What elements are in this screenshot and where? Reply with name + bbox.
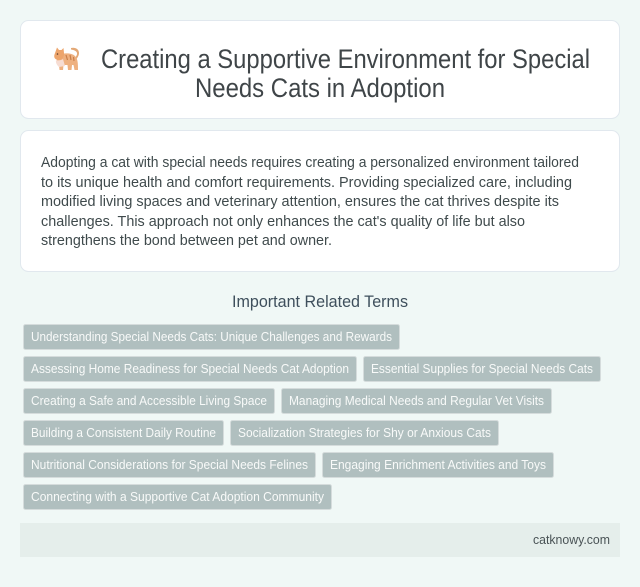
title: Needs Cats in Adoption [195, 73, 445, 103]
tag list: Assessing Home Readiness for Special Needs Cat Adoption [31, 362, 349, 376]
tag list: Engaging Enrichment Activities and Toys [330, 458, 546, 472]
tag list: Building a Consistent Daily Routine [31, 426, 216, 440]
tag list: Essential Supplies for Special Needs Cats [371, 362, 593, 376]
icon: cat [54, 48, 79, 70]
footer: catknowy.com [533, 533, 610, 547]
tag list [24, 324, 600, 510]
tag list: Connecting with a Supportive Cat Adoption Community [31, 490, 325, 504]
panel: description: strengthens the bond between pet and owner. [41, 232, 332, 249]
tag list: Socialization Strategies for Shy or Anxious Cats [238, 426, 491, 440]
tag list: Creating a Safe and Accessible Living Space [31, 394, 267, 408]
panel: description [20, 130, 620, 272]
footer [20, 523, 620, 557]
panel: description: modified living spaces and veterinary attention, ensures the cat thrives despite its [41, 193, 559, 210]
title [101, 44, 590, 103]
tag list: Understanding Special Needs Cats: Unique Challenges and Rewards [31, 330, 392, 344]
panel: description: Adopting a cat with special needs requires creating a personalized environment tailored [41, 154, 579, 171]
panel: description: challenges. This approach not only enhances the cat's quality of life but also [41, 213, 525, 230]
tag list: Nutritional Considerations for Special Needs Felines [31, 458, 308, 472]
heading: related terms: Important Related Terms [232, 293, 408, 311]
panel: description: to its unique health and comfort requirements. Providing specialized care, including [41, 174, 572, 191]
tag list: Managing Medical Needs and Regular Vet Visits [289, 394, 544, 408]
title: Creating a Supportive Environment for Special [101, 44, 590, 74]
panel: title card [20, 20, 620, 118]
